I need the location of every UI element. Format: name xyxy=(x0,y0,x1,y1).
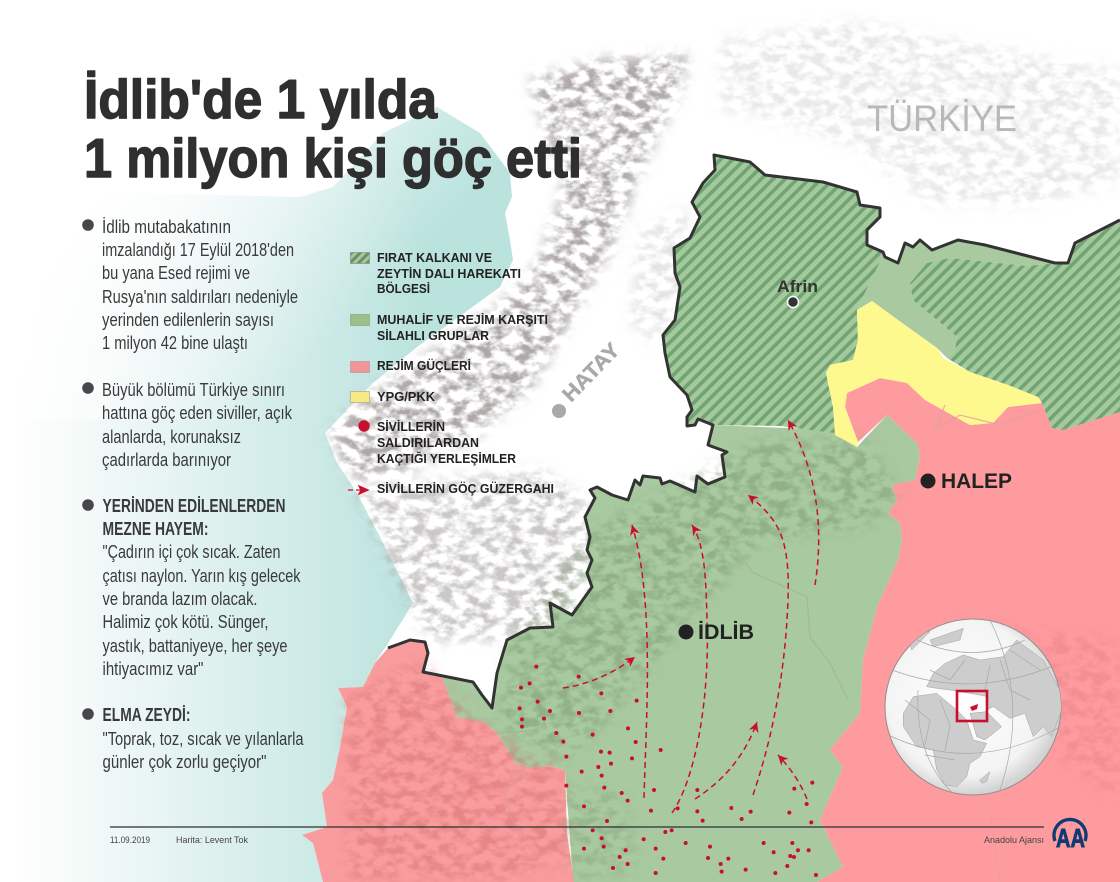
text block: tents at the border: çadırlarda barınıyor xyxy=(102,449,231,470)
region: Afrin hatched zone xyxy=(663,155,885,433)
legend marker: settlements xyxy=(358,420,370,432)
legend: ZEYTİN DALI HAREKATI xyxy=(377,266,521,281)
text block: Mezne Hayem quote: çatısı naylon. Yarın kış gelecek xyxy=(102,565,301,586)
text block: displaced count: imzalandığı 17 Eylül 2018'den xyxy=(102,239,294,260)
text block: Elma Zeydi quote: günler çok zorlu geçiyor" xyxy=(102,751,266,772)
legend: YPG/PKK xyxy=(377,390,435,404)
legend: SİVİLLERİN xyxy=(377,419,445,434)
text block: displaced count: 1 milyon 42 bine ulaştı xyxy=(102,332,248,353)
legend: SALDIRILARDAN xyxy=(377,436,479,450)
legend swatch: regime xyxy=(350,362,370,372)
legend xyxy=(348,251,554,496)
legend swatch: YPG/PKK xyxy=(350,392,370,402)
text block: Mezne Hayem quote: ve branda lazım olacak. xyxy=(102,588,258,609)
text block: Mezne Hayem quote: "Çadırın içi çok sıcak. Zaten xyxy=(102,541,280,562)
text block: tents at the border: alanlarda, korunaksız xyxy=(102,426,241,447)
legend: MUHALİF VE REJİM KARŞITI xyxy=(377,312,548,327)
legend: SİLAHLI GRUPLAR xyxy=(377,328,489,343)
title xyxy=(84,68,582,189)
region: plain green north band xyxy=(857,240,1055,358)
footer rule xyxy=(110,826,1044,828)
text block: Mezne Hayem quote: MEZNE HAYEM: xyxy=(102,518,208,539)
legend swatch: hatched zone xyxy=(350,252,370,264)
text block: tents at the border: Büyük bölümü Türkiye sınırı xyxy=(102,379,285,400)
region: eastern hatched zone xyxy=(910,220,1120,430)
region: regime forces west (red) xyxy=(302,640,574,882)
place label: Hatay: HATAY xyxy=(558,339,625,406)
text block: Mezne Hayem quote xyxy=(82,495,301,679)
footer: agency name: Anadolu Ajansı xyxy=(984,835,1044,846)
globe: focus box xyxy=(957,691,987,721)
migration route arrows xyxy=(563,420,819,813)
text block: tents at the border: hattına göç eden siviller, açık xyxy=(102,402,293,423)
settlements civilians fled xyxy=(518,665,818,877)
legend: KAÇTIĞI YERLEŞİMLER xyxy=(377,451,516,466)
footer: credit: Harita: Levent Tok xyxy=(176,835,248,846)
legend swatch: opposition xyxy=(350,314,370,326)
place label: Afrin xyxy=(777,277,818,308)
text block: Mezne Hayem quote: Halimiz çok kötü. Sünger, xyxy=(102,611,268,632)
text block: Elma Zeydi quote: "Toprak, toz, sıcak ve yılanlarla xyxy=(102,728,304,749)
text block: displaced count: yerinden edilenlerin sayısı xyxy=(102,309,274,330)
border line Turkey-Syria xyxy=(388,155,1120,708)
text block: displaced count: bu yana Esed rejimi ve xyxy=(102,262,250,283)
footer: date: 11.09.2019 xyxy=(110,835,150,846)
region: regime forces east (red) xyxy=(817,378,1120,882)
region: YPG/PKK yellow xyxy=(826,301,1042,447)
text block: displaced count: Rusya'nın saldırıları nedeniyle xyxy=(102,286,298,307)
title: İdlib'de 1 yılda xyxy=(84,68,437,130)
text block: Mezne Hayem quote: ihtiyacımız var" xyxy=(102,658,204,679)
text block: Elma Zeydi quote: ELMA ZEYDİ: xyxy=(102,704,190,725)
legend: REJİM GÜÇLERİ xyxy=(377,358,471,373)
legend: BÖLGESİ xyxy=(377,281,430,296)
text block: displaced count xyxy=(82,216,298,353)
text block: tents at the border xyxy=(82,379,293,470)
region: opposition-held Idlib (green) xyxy=(388,415,920,882)
text block: displaced count: İdlib mutabakatının xyxy=(102,216,231,237)
sea xyxy=(0,100,520,882)
locator globe xyxy=(885,619,1062,795)
text block: Elma Zeydi quote xyxy=(82,704,304,772)
logo: Anadolu Agency: AA xyxy=(1056,823,1085,853)
title: 1 milyon kişi göç etti xyxy=(84,127,582,189)
terrain: Türkiye and Hatay mountains xyxy=(330,20,1120,640)
terrain: shading on green and red areas xyxy=(345,440,1120,880)
place label: Halep: HALEP xyxy=(941,470,1012,493)
place label: Türkiye: TÜRKİYE xyxy=(867,98,1017,139)
text block: Mezne Hayem quote: yastık, battaniyeye, her şeye xyxy=(102,635,288,656)
globe: Syria highlight xyxy=(970,704,978,711)
legend: FIRAT KALKANI VE xyxy=(377,251,492,265)
legend: SİVİLLERİN GÖÇ GÜZERGAHI xyxy=(377,481,554,496)
logo: Anadolu Agency xyxy=(1054,819,1086,853)
roads xyxy=(500,405,1040,882)
text block: Mezne Hayem quote: YERİNDEN EDİLENLERDEN xyxy=(102,495,286,516)
legend marker: route arrow xyxy=(348,486,368,494)
place label: Afrin: Afrin xyxy=(777,277,818,296)
place label: Idlib: İDLİB xyxy=(698,621,754,644)
